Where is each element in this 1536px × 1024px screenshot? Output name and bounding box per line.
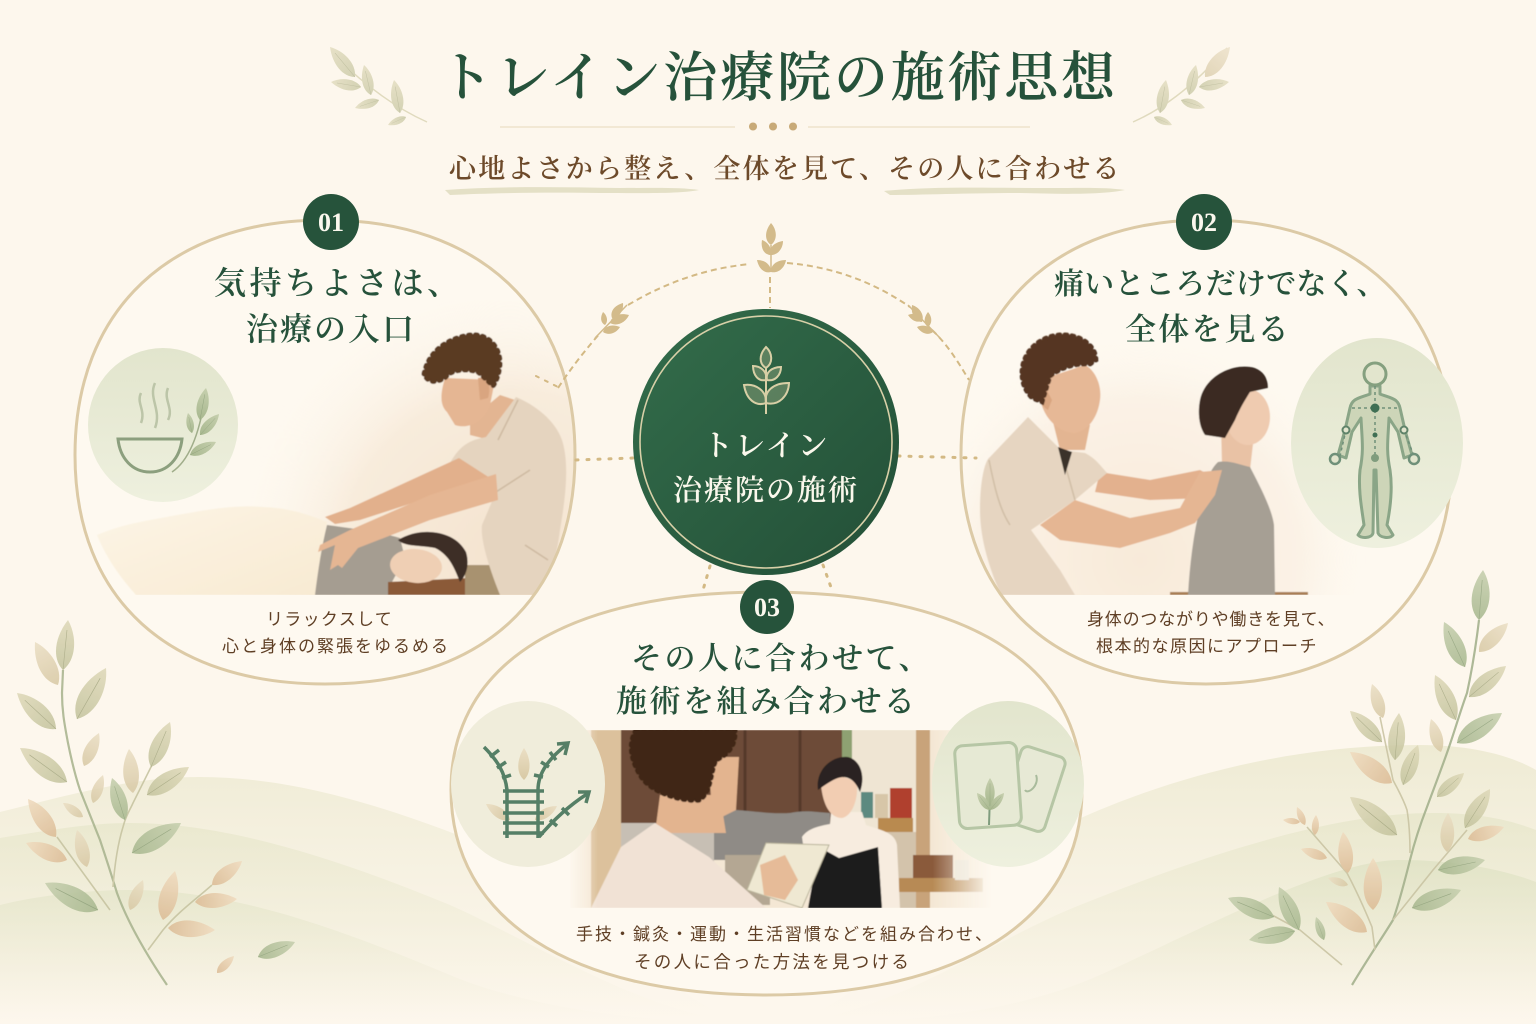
photo: massage treatment (98, 332, 574, 595)
photo: consultation (570, 730, 1000, 908)
heading 03 (616, 641, 932, 719)
panel 01: 気持ちよさは、治療の入口 (75, 194, 580, 684)
description 02: 身体のつながりや働きを見て、 (1087, 610, 1335, 629)
connector sprig: top (754, 223, 789, 275)
subtitle: 心地よさから整え、全体を見て、その人に合わせる (449, 154, 1122, 184)
heading 03: その人に合わせて、 (631, 641, 932, 676)
background: watercolour hills (0, 745, 1536, 1024)
badge 03 (740, 580, 794, 634)
description 01 (222, 610, 450, 656)
badge 02: 02 (1191, 208, 1217, 237)
badge 01 (303, 194, 359, 250)
connector sprig: left (595, 301, 631, 338)
panel 03: その人に合わせて、施術を組み合わせる (451, 580, 1084, 995)
heading 03: 施術を組み合わせる (616, 684, 918, 719)
central label: トレイン (703, 430, 830, 463)
central label: 治療院の施術 (673, 474, 859, 507)
description 01: リラックスして (266, 610, 393, 629)
title sprig: right (1133, 43, 1235, 128)
description 03 (576, 925, 994, 972)
panel 02: 痛いところだけでなく、全体を見る (950, 194, 1463, 684)
icon: menu cards with leaf (932, 701, 1084, 867)
badge 01: 01 (318, 208, 344, 237)
botanical: left plant (11, 619, 298, 985)
connectors: dotted lines from centre to panels (536, 263, 976, 590)
icon: central sprig (739, 347, 794, 414)
description 02: 根本的な原因にアプローチ (1096, 637, 1318, 656)
central label (673, 430, 859, 507)
badge 03: 03 (754, 593, 780, 622)
description 02 (1087, 610, 1335, 656)
heading 01 (214, 265, 463, 347)
heading 02: 痛いところだけでなく、 (1054, 268, 1387, 301)
heading 01: 治療の入口 (246, 311, 416, 347)
connector sprig: right (907, 303, 940, 338)
heading 01: 気持ちよさは、 (214, 265, 463, 301)
subtitle brush underlines (445, 187, 1125, 195)
description 01: 心と身体の緊張をゆるめる (222, 637, 450, 656)
heading 02 (1054, 268, 1387, 347)
photo: posture check (974, 332, 1309, 595)
title divider (500, 122, 1030, 130)
central circle: トレイン治療院の施術 (633, 309, 899, 575)
title sprig: left (325, 43, 427, 128)
badge 02 (1176, 194, 1232, 250)
description 03: 手技・鍼灸・運動・生活習慣などを組み合わせ、 (576, 925, 994, 944)
icon: body with connected joints (1291, 338, 1463, 548)
heading 02: 全体を見る (1125, 312, 1291, 347)
title: トレイン治療院の施術思想 (439, 48, 1118, 108)
icon: ladder with branching arrows (451, 701, 605, 867)
botanical: right plant (1225, 569, 1513, 985)
icon: tea bowl with steam and leaves (88, 348, 238, 502)
description 03: その人に合った方法を見つける (634, 952, 911, 972)
